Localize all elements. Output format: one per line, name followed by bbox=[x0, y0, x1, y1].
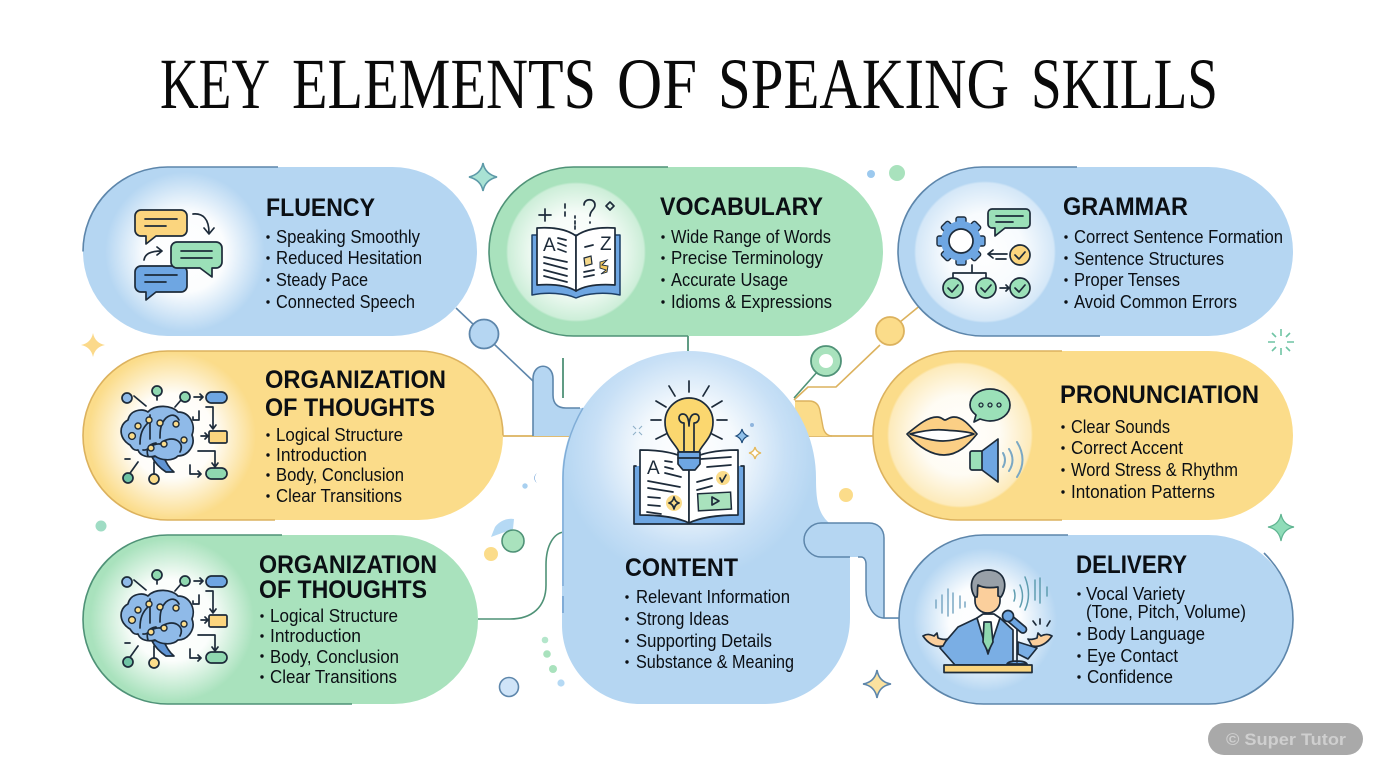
heading: pronunciation: PRONUNCIATION bbox=[1060, 381, 1259, 409]
list: grammar: Correct Sentence Formation bbox=[1074, 226, 1283, 247]
watermark bbox=[1208, 723, 1363, 755]
heading: content: CONTENT bbox=[625, 554, 738, 582]
list: organization of thoughts: Clear Transitions bbox=[270, 666, 397, 687]
connector network bbox=[456, 304, 922, 619]
icon: brain and flow bbox=[121, 570, 227, 668]
heading: organization of thoughts: OF THOUGHTS bbox=[259, 576, 427, 604]
title: KEY bbox=[160, 44, 270, 124]
icon: open dictionary: Z bbox=[600, 234, 612, 255]
list: organization of thoughts: Introduction bbox=[276, 444, 367, 465]
heading: organization of thoughts bbox=[265, 366, 446, 422]
decorative stars and dots bbox=[81, 163, 1294, 698]
title: ELEMENTS bbox=[292, 44, 596, 124]
list: content: Substance & Meaning bbox=[636, 651, 794, 672]
icon: chat bubbles bbox=[135, 210, 222, 300]
list: grammar: Avoid Common Errors bbox=[1074, 291, 1237, 312]
list: organization of thoughts bbox=[266, 424, 404, 506]
list: content bbox=[625, 586, 794, 672]
list: delivery: Body Language bbox=[1087, 623, 1205, 644]
list: pronunciation: Word Stress & Rhythm bbox=[1071, 459, 1238, 480]
list: delivery: (Tone, Pitch, Volume) bbox=[1086, 601, 1246, 622]
list: fluency: Connected Speech bbox=[276, 291, 415, 312]
list: vocabulary bbox=[661, 226, 832, 312]
heading: organization of thoughts: ORGANIZATION bbox=[265, 366, 446, 394]
title bbox=[160, 44, 1218, 124]
icon: light bulb and open book bbox=[633, 381, 761, 524]
list: organization of thoughts: Clear Transitions bbox=[276, 485, 402, 506]
list: fluency: Steady Pace bbox=[276, 269, 368, 290]
list: vocabulary: Idioms & Expressions bbox=[671, 291, 832, 312]
list: grammar: Proper Tenses bbox=[1074, 269, 1180, 290]
list: grammar: Sentence Structures bbox=[1074, 248, 1224, 269]
list: pronunciation bbox=[1061, 416, 1238, 502]
list: organization of thoughts: Logical Structure bbox=[270, 605, 398, 626]
list: content: Strong Ideas bbox=[636, 608, 729, 629]
list: vocabulary: Precise Terminology bbox=[671, 247, 824, 268]
icon: gear, checks and flow bbox=[937, 209, 1030, 298]
list: pronunciation: Clear Sounds bbox=[1071, 416, 1170, 437]
title: SPEAKING bbox=[718, 44, 1009, 124]
heading: organization of thoughts: OF THOUGHTS bbox=[265, 394, 435, 422]
panel: organization of thoughts (yellow) bbox=[83, 351, 503, 520]
list: delivery bbox=[1077, 583, 1246, 687]
list: fluency: Reduced Hesitation bbox=[276, 247, 422, 268]
list: organization of thoughts: Logical Structure bbox=[276, 424, 403, 445]
heading: vocabulary: VOCABULARY bbox=[660, 193, 823, 221]
list: delivery: Eye Contact bbox=[1087, 645, 1178, 666]
watermark: © Super Tutor bbox=[1226, 730, 1346, 749]
panel: pronunciation bbox=[873, 351, 1293, 520]
panel: grammar bbox=[898, 167, 1293, 336]
list: delivery: Confidence bbox=[1087, 666, 1173, 687]
icon: brain and flow bbox=[121, 386, 227, 484]
icon: open dictionary: A bbox=[543, 235, 556, 256]
list: content: Supporting Details bbox=[636, 630, 772, 651]
icon: open dictionary bbox=[532, 200, 620, 298]
list: pronunciation: Intonation Patterns bbox=[1071, 481, 1215, 502]
heading: organization of thoughts: ORGANIZATION bbox=[259, 551, 437, 579]
node: blue circle bbox=[470, 320, 498, 348]
node: yellow circle bbox=[876, 317, 904, 345]
list: organization of thoughts: Body, Conclusion bbox=[276, 464, 404, 485]
icon: lips, speech bubble, speaker bbox=[907, 389, 1022, 482]
list: organization of thoughts bbox=[260, 605, 399, 687]
connector tube to delivery bbox=[804, 523, 899, 619]
list: organization of thoughts: Introduction bbox=[270, 625, 361, 646]
list: content: Relevant Information bbox=[636, 586, 790, 607]
list: fluency bbox=[266, 226, 422, 312]
heading: grammar: GRAMMAR bbox=[1063, 193, 1188, 221]
list: vocabulary: Accurate Usage bbox=[671, 269, 788, 290]
heading: fluency: FLUENCY bbox=[266, 194, 375, 222]
list: fluency: Speaking Smoothly bbox=[276, 226, 421, 247]
list: grammar bbox=[1064, 226, 1283, 312]
list: pronunciation: Correct Accent bbox=[1071, 437, 1183, 458]
title: SKILLS bbox=[1031, 44, 1218, 124]
list: vocabulary: Wide Range of Words bbox=[671, 226, 831, 247]
list: delivery: Vocal Variety bbox=[1086, 583, 1186, 604]
panel: organization of thoughts (green) bbox=[83, 535, 478, 704]
panel: fluency bbox=[83, 167, 477, 336]
icon: light bulb and open book: A bbox=[647, 458, 660, 479]
node: green ring bbox=[811, 346, 841, 376]
panel: vocabulary bbox=[489, 167, 883, 336]
panel: delivery bbox=[899, 535, 1293, 704]
heading: delivery: DELIVERY bbox=[1076, 551, 1187, 579]
title: OF bbox=[617, 44, 697, 124]
heading: organization of thoughts bbox=[259, 551, 437, 604]
list: organization of thoughts: Body, Conclusion bbox=[270, 646, 399, 667]
panel: content (centre) bbox=[562, 351, 899, 704]
icon: speaker at podium bbox=[923, 570, 1052, 672]
